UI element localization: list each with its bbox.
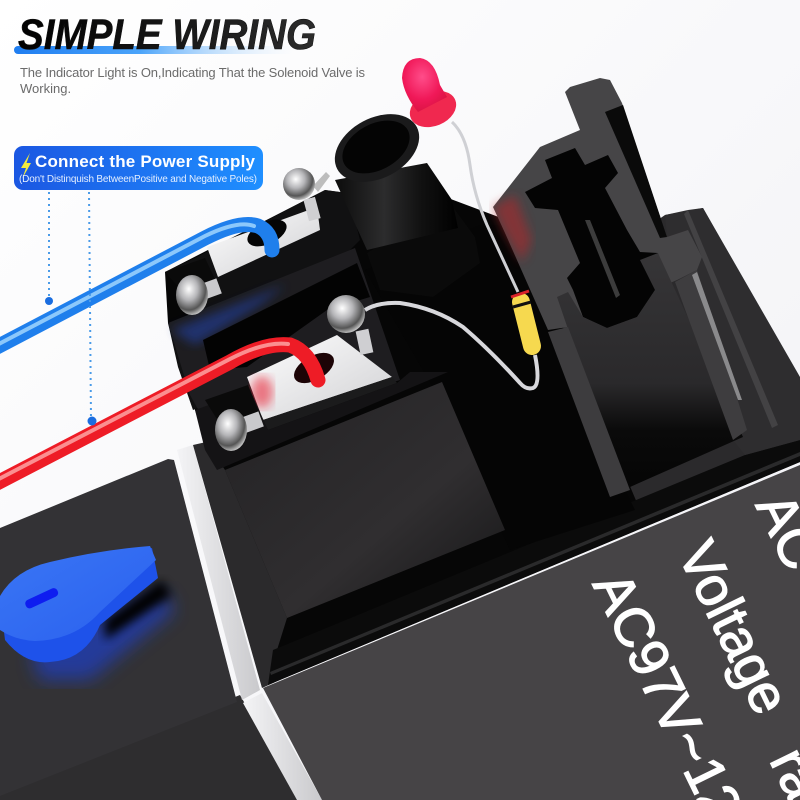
- panel: outer rear plate: [665, 208, 800, 455]
- knob slot: [24, 587, 59, 610]
- red silver plate: [247, 335, 392, 420]
- icon: lightning bolt: [21, 153, 31, 179]
- rotary knob: [0, 546, 158, 662]
- top terminal hole: [243, 214, 291, 252]
- terminal screw: upper left: [165, 258, 222, 315]
- callout heading: Connect the Power Supply: [35, 152, 256, 171]
- panel: front terminal block: [225, 382, 505, 618]
- tube ring: [323, 100, 431, 196]
- terminal screw: wire joint: [327, 295, 373, 355]
- panel: lower left housing: [0, 695, 300, 800]
- description: The Indicator Light is On,Indicating That the Solenoid Valve is: [20, 65, 366, 80]
- resistor lead wire: [365, 303, 538, 388]
- label text on housing: [581, 483, 800, 800]
- tube collar: [367, 203, 480, 297]
- resistor: [511, 291, 532, 346]
- chrome strip: [177, 445, 322, 800]
- leader dots: [45, 297, 96, 426]
- top silver plate: [207, 207, 320, 277]
- red terminal hole: [289, 347, 339, 389]
- black recess: [203, 263, 370, 370]
- terminal screw: top: [283, 168, 330, 221]
- panel: rear bracket with slot: [493, 78, 702, 330]
- panel: top terminal bracket: [165, 190, 380, 410]
- terminal screw: lower left: [205, 385, 264, 451]
- red reflection on plate: [251, 376, 273, 408]
- title underline: [14, 46, 294, 54]
- dark side wall: [193, 208, 800, 688]
- label line: Voltage: Voltage: [666, 531, 800, 723]
- tube: [335, 163, 458, 250]
- indicator LED: [402, 58, 462, 134]
- red wire: [0, 344, 318, 484]
- description: Working.: [20, 81, 71, 96]
- dotted leader lines: [49, 192, 91, 420]
- knob shadow: [105, 580, 172, 640]
- blue wire: [0, 224, 272, 348]
- black band: [268, 440, 800, 685]
- callout: connect the power supply: [14, 146, 263, 190]
- black underlay of the mechanism: [165, 190, 640, 650]
- keyed slot: [525, 148, 658, 328]
- panel: left switch housing: [0, 459, 237, 796]
- panel: black column: [365, 225, 635, 550]
- red reflection: [493, 195, 532, 262]
- panel: main housing with label: [263, 465, 800, 800]
- title: SIMPLE WIRING: [18, 11, 316, 59]
- gray rails: [548, 270, 747, 497]
- panel: middle bracket: [168, 248, 400, 440]
- dark slit: [605, 105, 667, 238]
- panel: glossy inner block: [557, 253, 743, 490]
- callout subtext: (Don't Distinquish BetweenPositive and Negative Poles): [19, 174, 257, 185]
- blue reflection: [172, 285, 285, 345]
- LED lead wire: [452, 122, 518, 292]
- knob glow: [30, 590, 175, 680]
- red bracket: [195, 372, 448, 470]
